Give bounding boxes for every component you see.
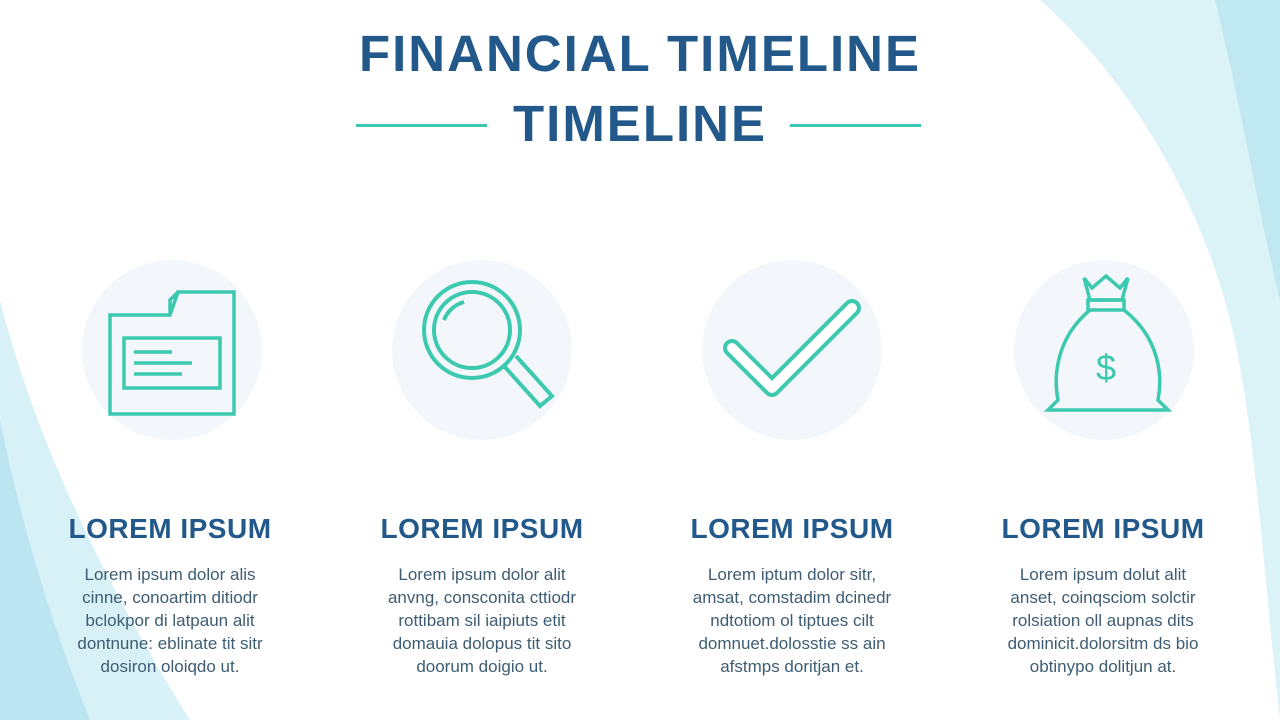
column 3 <box>690 513 894 676</box>
column 2 <box>380 513 584 676</box>
subtitle with lines: TIMELINE <box>513 95 767 152</box>
column 2: doorum doigio ut. <box>416 657 548 676</box>
column 1: cinne, conoartim ditiodr <box>82 588 258 607</box>
column 1: Lorem ipsum dolor alis <box>84 565 256 584</box>
column 3: amsat, comstadim dcinedr <box>693 588 891 607</box>
column 4: obtinypo dolitjun at. <box>1030 657 1176 676</box>
column 3: LOREM IPSUM <box>690 513 894 544</box>
icon: money bag: $ <box>1096 347 1116 388</box>
icon: checkmark <box>702 260 882 440</box>
column 3: afstmps doritjan et. <box>720 657 864 676</box>
column 1: bclokpor di latpaun alit <box>85 611 255 630</box>
column 3: domnuet.dolosstie ss ain <box>698 634 886 653</box>
column 1: dosiron oloiqdo ut. <box>101 657 239 676</box>
column 2: Lorem ipsum dolor alit <box>398 565 566 584</box>
column 2: anvng, consconita cttiodr <box>388 588 576 607</box>
column 1 <box>68 513 272 676</box>
icon: magnifier <box>392 260 572 440</box>
column 4: dominicit.dolorsitm ds bio <box>1008 634 1198 653</box>
column 3: ndtotiom ol tiptues cilt <box>710 611 874 630</box>
column 2: rottibam sil iaipiuts etit <box>398 611 566 630</box>
column 3: Lorem iptum dolor sitr, <box>708 565 876 584</box>
column 4: LOREM IPSUM <box>1001 513 1205 544</box>
column 4: Lorem ipsum dolut alit <box>1020 565 1186 584</box>
column 2: domauia dolopus tit sito <box>393 634 571 653</box>
column 1: dontnune: eblinate tit sitr <box>77 634 263 653</box>
column 2: LOREM IPSUM <box>380 513 584 544</box>
column 4: rolsiation oll aupnas dits <box>1012 611 1194 630</box>
icon: money bag <box>1014 260 1194 440</box>
subtitle with lines <box>356 95 921 152</box>
title: FINANCIAL TIMELINE <box>359 25 921 82</box>
column 4 <box>1001 513 1205 676</box>
icon: document <box>82 260 262 440</box>
column 1: LOREM IPSUM <box>68 513 272 544</box>
column 4: anset, coinqsciom solctir <box>1010 588 1196 607</box>
